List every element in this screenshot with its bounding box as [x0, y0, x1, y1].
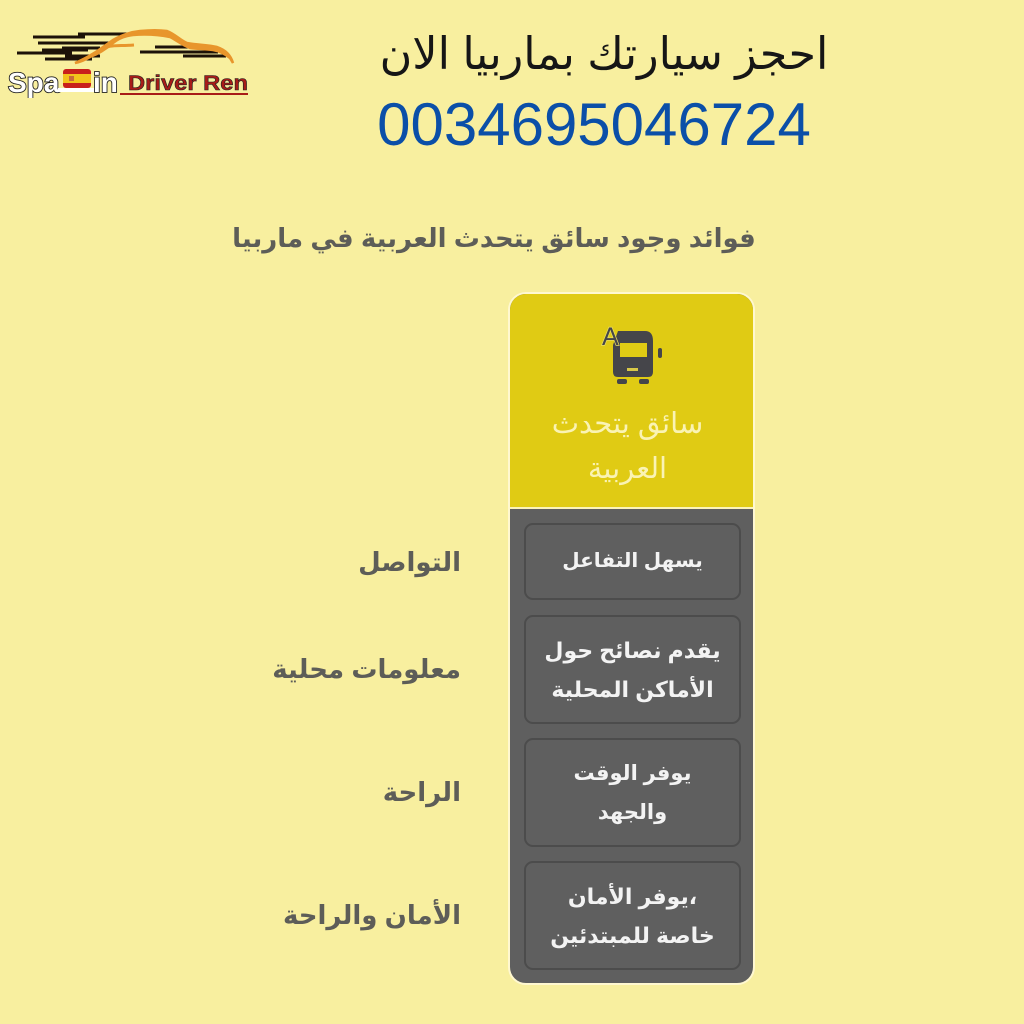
cell: communication: يسهل التفاعل: [562, 550, 703, 572]
header label: العربية: [588, 453, 667, 485]
column header: [510, 294, 753, 509]
logo wordmark: Driver Ren: [128, 72, 248, 95]
icon: bus with letter A: [601, 323, 662, 384]
cell: comfort: يوفر الوقت: [574, 762, 691, 784]
heading: book your car: احجز سيارتك بماربيا الان: [380, 30, 828, 79]
cell: local information: [524, 615, 741, 724]
cell: local information: يقدم نصائح حول: [544, 638, 721, 662]
cell: safety: [524, 861, 741, 970]
phone number: 0034695046724: [377, 91, 811, 158]
chart title: فوائد وجود سائق يتحدث العربية في ماربيا: [232, 223, 756, 253]
cell: safety: خاصة للمبتدئين: [550, 922, 715, 948]
icon: car silhouette: [17, 30, 233, 63]
cell: comfort: [524, 738, 741, 847]
logo wordmark: Spa: [8, 67, 60, 98]
row label: local information: معلومات محلية: [272, 654, 461, 684]
row label: communication: التواصل: [358, 547, 461, 577]
header label: [552, 408, 703, 486]
panel: Arabic-speaking driver column: [508, 292, 755, 985]
cell: comfort: والجهد: [598, 800, 667, 824]
cell: local information: الأماكن المحلية: [551, 676, 714, 702]
cell: communication: [524, 523, 741, 600]
row label: safety and comfort: الأمان والراحة: [283, 900, 461, 930]
logo wordmark: [8, 67, 248, 98]
logo wordmark: in: [93, 67, 118, 98]
cell: safety: ،يوفر الأمان: [568, 884, 697, 908]
header label: سائق يتحدث: [552, 408, 703, 440]
icon: bus with letter A: A: [602, 323, 619, 351]
row label: comfort: الراحة: [383, 777, 461, 807]
logo: [8, 29, 248, 98]
